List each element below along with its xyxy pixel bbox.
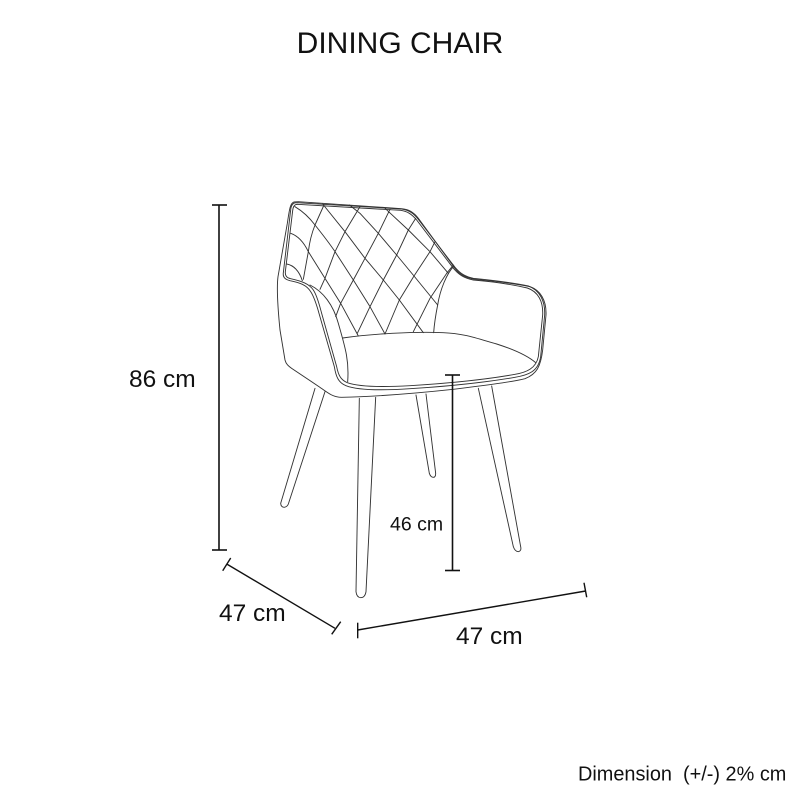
front left leg — [356, 397, 376, 598]
front right leg — [478, 386, 521, 552]
back left leg — [281, 388, 325, 507]
outer shell — [277, 202, 546, 397]
dimension: depth arrow — [223, 558, 341, 634]
footnote: dimension tolerance: Dimension (+/-) 2% cm — [578, 764, 786, 786]
chair illustration — [277, 202, 546, 598]
dimension: seat height arrow — [445, 375, 460, 570]
chair legs — [281, 386, 521, 598]
outer piping — [283, 203, 545, 390]
dimension: overall height arrow — [212, 205, 227, 550]
label: width: 47 cm — [456, 623, 523, 650]
title: DINING CHAIR — [297, 27, 503, 60]
inner piping — [285, 204, 543, 387]
quilted back stitching — [287, 204, 453, 336]
label: depth: 47 cm — [219, 600, 286, 627]
chair body and back — [277, 202, 546, 397]
label: seat height: 46 cm — [390, 514, 443, 536]
label: overall height: 86 cm — [129, 366, 196, 393]
back right leg — [416, 394, 436, 477]
seat cushion — [310, 266, 536, 382]
dimension: width arrow — [358, 583, 587, 638]
